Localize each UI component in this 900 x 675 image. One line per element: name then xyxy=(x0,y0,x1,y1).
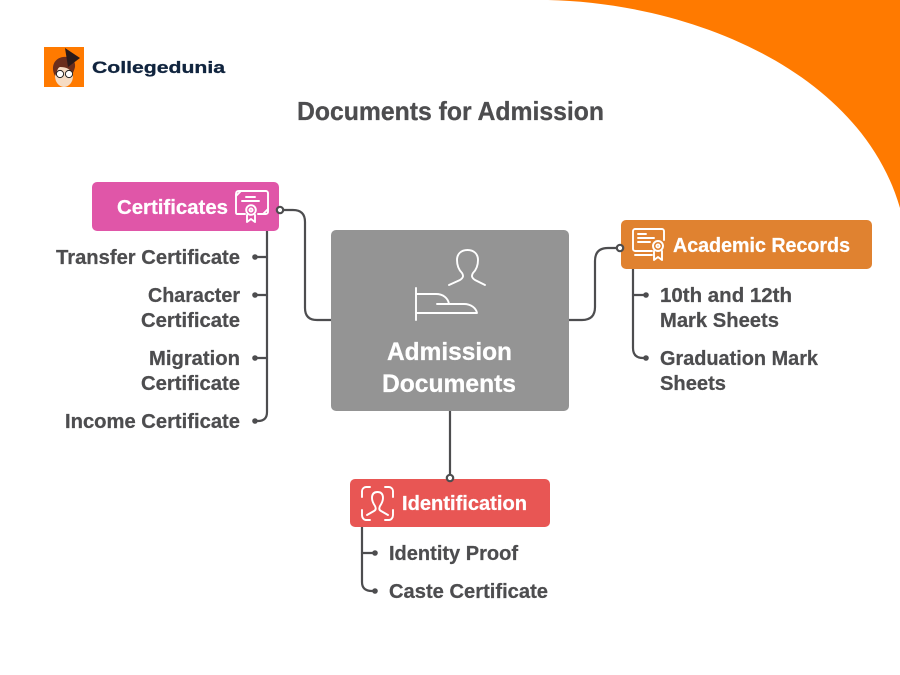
heading: certificates xyxy=(92,182,279,231)
logo: Collegedunia xyxy=(44,47,226,87)
heading: certificates: Certificates xyxy=(117,197,228,219)
item: Income Certificate: Income Certificate xyxy=(65,411,240,433)
item: 10th and 12th Mark Sheets xyxy=(660,285,792,332)
label: Admission Documents: Admission xyxy=(387,338,512,366)
icon: student face xyxy=(53,48,80,87)
connector: center to certificates xyxy=(284,210,331,320)
heading: academic records xyxy=(621,220,872,269)
panel: certificates branch xyxy=(56,182,283,433)
item: Migration Certificate: Certificate xyxy=(141,373,240,395)
node: academic records connector xyxy=(617,245,623,251)
icon: academic record xyxy=(633,229,664,260)
title: Documents for Admission xyxy=(297,96,604,126)
item: Character Certificate: Certificate xyxy=(141,310,240,332)
node: certificates connector xyxy=(277,207,283,213)
node: identification connector xyxy=(447,475,453,481)
item: 10th and 12th Mark Sheets: 10th and 12th xyxy=(660,285,792,307)
heading: identification xyxy=(350,479,550,527)
tree connector: certificates xyxy=(252,231,267,424)
tree connector: identification xyxy=(362,527,378,594)
item: Graduation Mark Sheets: Sheets xyxy=(660,373,726,395)
tree connector: academic records xyxy=(633,269,649,361)
connector: center to identification xyxy=(449,411,451,474)
item: Migration Certificate: Migration xyxy=(149,348,240,370)
panel: academic records branch xyxy=(617,220,872,395)
item: Migration Certificate xyxy=(141,348,240,395)
item: Graduation Mark Sheets: Graduation Mark xyxy=(660,348,819,370)
panel: central admission documents xyxy=(331,230,569,411)
item: Graduation Mark Sheets xyxy=(660,348,819,395)
panel: central admission documents: Documents xyxy=(382,370,516,398)
item: Character Certificate xyxy=(141,285,240,332)
logo wordmark: Collegedunia xyxy=(92,58,226,77)
item: Transfer Certificate: Transfer Certificate xyxy=(56,247,240,269)
heading: academic records: Academic Records xyxy=(673,235,850,257)
heading: identification: Identification xyxy=(402,493,527,515)
decorative orange corner shape xyxy=(548,0,900,208)
item: 10th and 12th Mark Sheets: Mark Sheets xyxy=(660,310,779,332)
item: Character Certificate: Character xyxy=(148,285,240,307)
icon: certificate xyxy=(236,191,268,222)
icon: face scan xyxy=(362,487,393,520)
panel: identification branch xyxy=(350,475,550,603)
item: Identity Proof: Identity Proof xyxy=(389,543,518,565)
connector: center to academic records xyxy=(569,248,616,320)
icon: person with hand xyxy=(416,250,485,320)
item: Caste Certificate: Caste Certificate xyxy=(389,581,548,603)
